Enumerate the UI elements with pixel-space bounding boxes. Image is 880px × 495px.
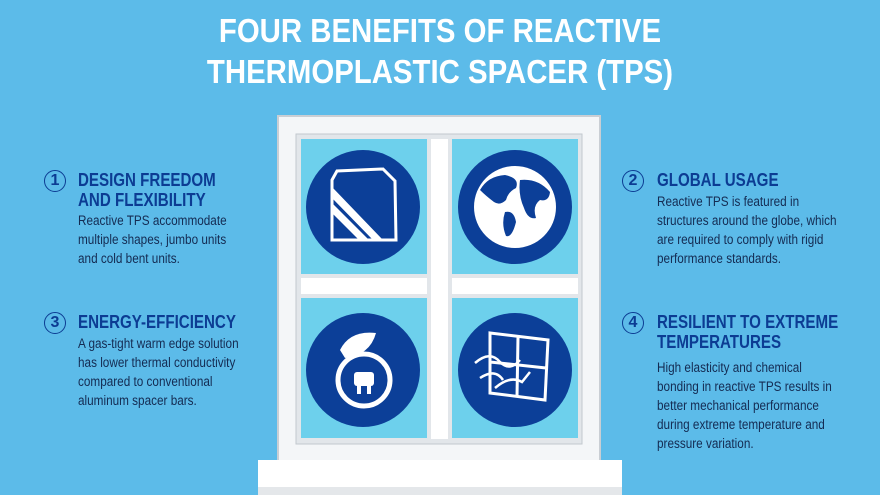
item 1: multiple shapes, jumbo units	[78, 232, 226, 247]
item 1: AND FLEXIBILITY	[78, 190, 206, 210]
item 2: performance standards.	[657, 251, 781, 266]
item 4: during extreme temperature and	[657, 417, 825, 432]
item 4: 4	[629, 314, 637, 331]
item 3: has lower thermal conductivity	[78, 355, 235, 370]
item 3: aluminum spacer bars.	[78, 393, 197, 408]
title: FOUR BENEFITS OF REACTIVE	[219, 12, 661, 49]
item 3: A gas-tight warm edge solution	[78, 336, 239, 351]
icon: window with airflow	[458, 313, 572, 427]
item 1: 1	[51, 172, 59, 189]
icon: globe	[458, 150, 572, 264]
item 2: structures around the globe, which	[657, 213, 837, 228]
icon: spacer shape	[306, 150, 420, 264]
title: THERMOPLASTIC SPACER (TPS)	[207, 53, 673, 90]
item 3: compared to conventional	[78, 374, 213, 389]
item 2: are required to comply with rigid	[657, 232, 823, 247]
item 1: and cold bent units.	[78, 251, 180, 266]
icon: eco plug	[306, 313, 420, 427]
item 4: bonding in reactive TPS results in	[657, 379, 832, 394]
item 2: Reactive TPS is featured in	[657, 194, 799, 209]
item 4: better mechanical performance	[657, 398, 819, 413]
item 4	[622, 312, 838, 451]
item 3: ENERGY-EFFICIENCY	[78, 312, 236, 332]
item 3: 3	[51, 314, 59, 331]
item 3	[44, 312, 239, 408]
item 1	[44, 170, 227, 266]
item 2	[622, 170, 837, 266]
item 2: 2	[629, 172, 637, 189]
item 4: TEMPERATURES	[657, 332, 781, 352]
title	[207, 12, 673, 90]
item 4: pressure variation.	[657, 436, 754, 451]
item 2: GLOBAL USAGE	[657, 170, 779, 190]
item 4: High elasticity and chemical	[657, 360, 802, 375]
item 1: DESIGN FREEDOM	[78, 170, 216, 190]
item 1: Reactive TPS accommodate	[78, 213, 227, 228]
item 4: RESILIENT TO EXTREME	[657, 312, 838, 332]
